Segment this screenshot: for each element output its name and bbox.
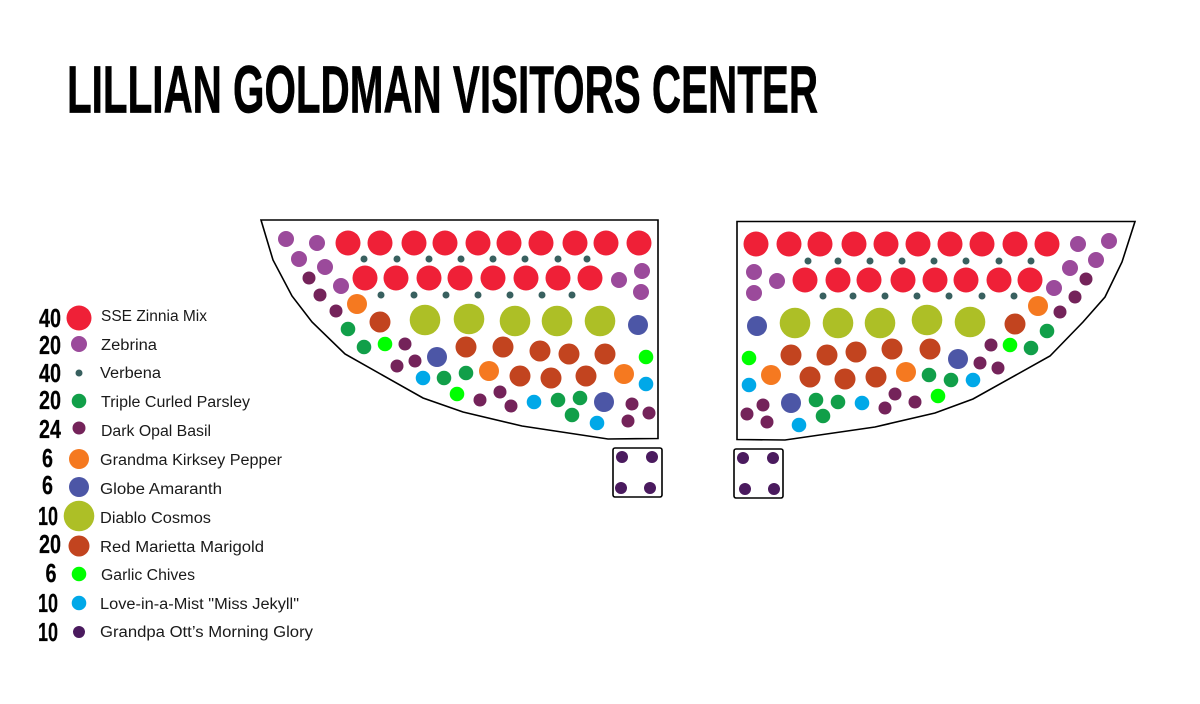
legend row: Globe Amaranth — [42, 471, 222, 500]
legend row: Diablo Cosmos: Diablo Cosmos — [100, 510, 211, 527]
legend row: Red Marietta Marigold: Red Marietta Marigold — [100, 539, 264, 556]
legend row: Triple Curled Parsley: 20 — [39, 386, 61, 415]
legend row: Garlic Chives — [46, 559, 195, 588]
legend row: Diablo Cosmos — [38, 501, 211, 531]
legend row: Triple Curled Parsley: Triple Curled Parsley — [101, 394, 250, 411]
legend row: Globe Amaranth: Globe Amaranth — [100, 481, 222, 498]
right bed: Red Marietta Marigold — [780, 314, 1026, 390]
right bed: Dark Opal Basil — [740, 272, 1092, 428]
right bed: Diablo Cosmos — [780, 305, 985, 338]
left bed: Verbena — [360, 256, 590, 298]
legend row: Dark Opal Basil: 24 — [39, 415, 61, 444]
legend row: Globe Amaranth: 6 — [42, 471, 53, 500]
left bed: SSE Zinnia Mix — [336, 230, 652, 290]
right bed: Grandma Kirksey Pepper — [761, 296, 1048, 385]
left bed: Garlic Chives — [378, 337, 653, 401]
legend row: Red Marietta Marigold: 20 — [39, 530, 61, 559]
left bed: Globe Amaranth — [427, 315, 648, 412]
legend row: Garlic Chives: 6 — [46, 559, 57, 588]
right bed: Zebrina — [746, 233, 1117, 301]
right bed: Verbena — [804, 258, 1034, 300]
legend row: Zebrina: Zebrina — [101, 337, 157, 354]
right bed outline — [737, 222, 1135, 440]
legend row: Love-in-a-Mist: Love-in-a-Mist "Miss Jekyll" — [100, 596, 299, 613]
panel: left small planter — [613, 448, 662, 497]
right bed: Love-in-a-Mist — [742, 373, 980, 432]
left planter: Morning Glory — [615, 451, 658, 494]
legend row: Red Marietta Marigold — [39, 530, 264, 559]
panel: left planting bed — [261, 220, 658, 439]
left bed: Diablo Cosmos — [410, 304, 615, 336]
legend row: Grandma Kirksey Pepper — [42, 444, 282, 473]
legend row: Dark Opal Basil — [39, 415, 211, 444]
left bed outline — [261, 220, 658, 439]
right bed: Triple Curled Parsley — [809, 324, 1054, 423]
legend row: Grandpa Ott's Morning Glory: 10 — [38, 618, 58, 647]
right planter: Morning Glory — [737, 452, 780, 495]
right bed: Garlic Chives — [742, 338, 1017, 403]
legend row: Grandpa Ott's Morning Glory: Grandpa Ott’s Morning Glory — [100, 624, 313, 641]
left bed: Dark Opal Basil — [302, 272, 656, 428]
left bed: Red Marietta Marigold — [370, 312, 616, 388]
legend row: Dark Opal Basil: Dark Opal Basil — [101, 423, 211, 440]
legend row: Triple Curled Parsley — [39, 386, 250, 415]
legend row: SSE Zinnia Mix: SSE Zinnia Mix — [101, 308, 207, 325]
legend row: Verbena: 40 — [39, 359, 61, 388]
left bed: Zebrina — [278, 231, 650, 300]
legend row: Garlic Chives: Garlic Chives — [101, 567, 195, 584]
legend row: Grandma Kirksey Pepper: Grandma Kirksey Pepper — [100, 452, 282, 469]
left bed: Love-in-a-Mist — [416, 371, 653, 430]
legend — [38, 304, 313, 647]
left bed: Grandma Kirksey Pepper — [347, 294, 634, 384]
left bed: Triple Curled Parsley — [341, 322, 587, 422]
legend row: Diablo Cosmos: 10 — [38, 502, 58, 531]
legend row: Love-in-a-Mist — [38, 589, 299, 618]
panel: right planting bed — [737, 222, 1135, 440]
legend row: Grandma Kirksey Pepper: 6 — [42, 444, 53, 473]
panel: right small planter — [734, 449, 783, 498]
right bed: SSE Zinnia Mix — [744, 232, 1060, 292]
left planter outline — [613, 448, 662, 497]
legend row: SSE Zinnia Mix — [39, 304, 207, 333]
legend row: Grandpa Ott's Morning Glory — [38, 618, 313, 647]
legend row: Verbena: Verbena — [100, 365, 161, 382]
right bed: Globe Amaranth — [747, 316, 968, 413]
legend row: Love-in-a-Mist: 10 — [38, 589, 58, 618]
right planter outline — [734, 449, 783, 498]
legend row: SSE Zinnia Mix: 40 — [39, 304, 61, 333]
legend row: Zebrina: 20 — [39, 331, 61, 360]
